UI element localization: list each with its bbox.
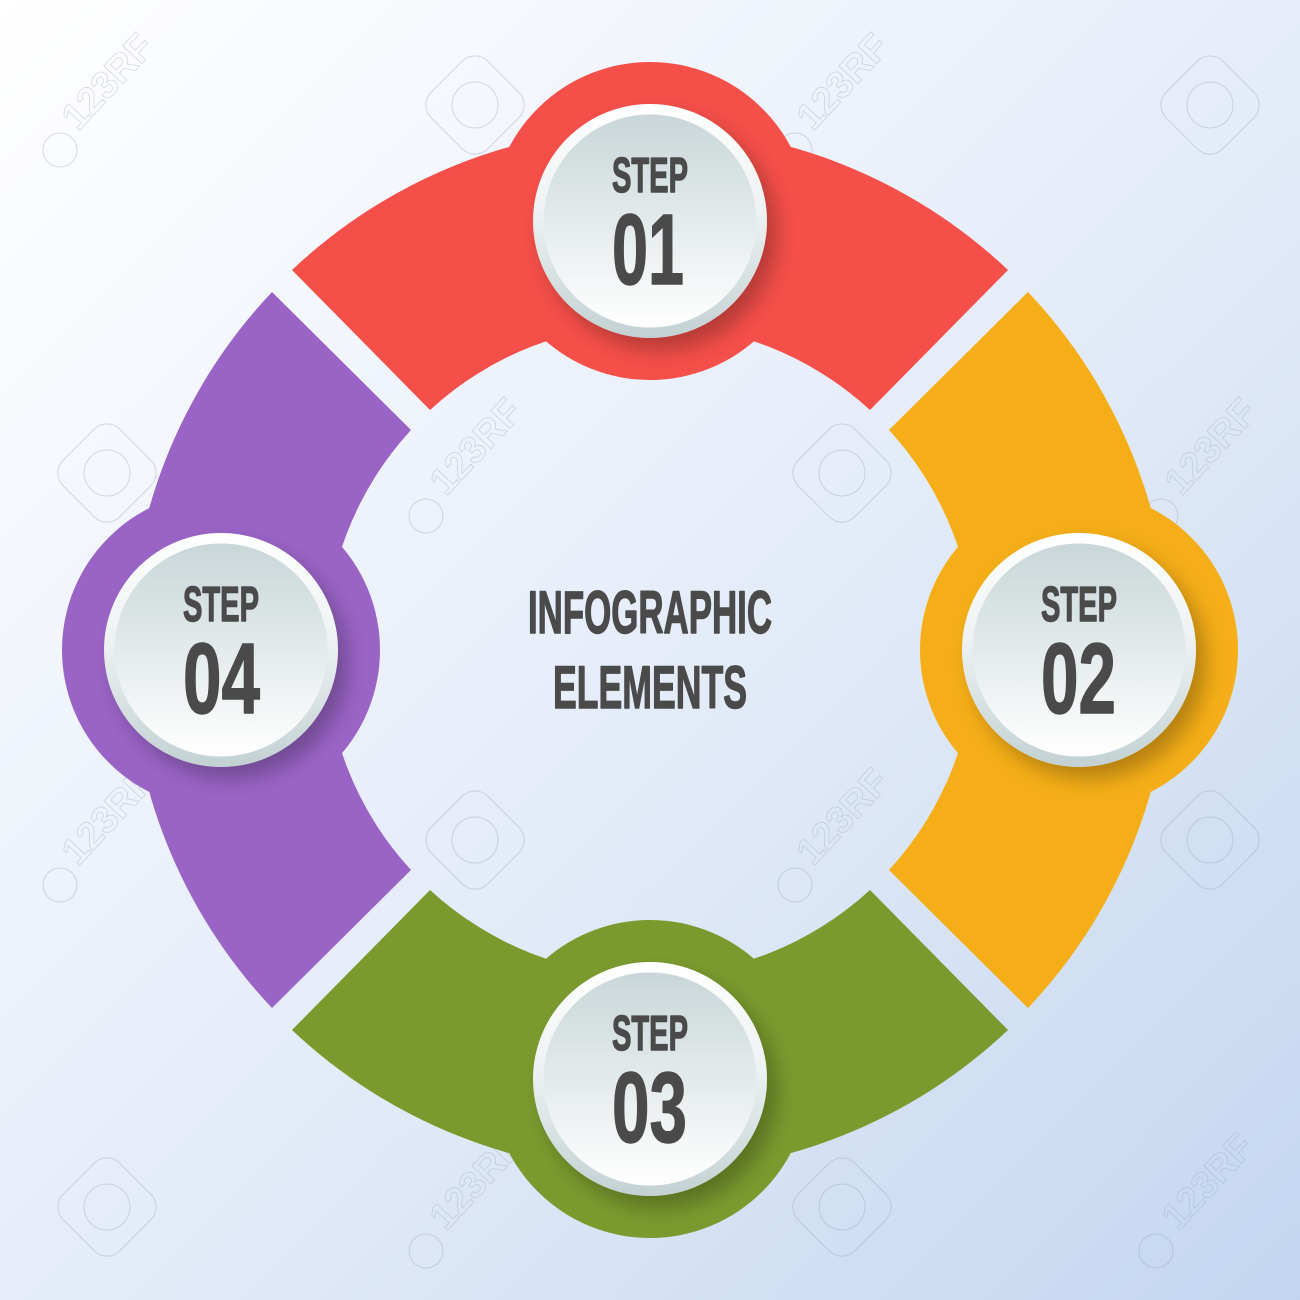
watermarks: 123RF: [422, 1126, 530, 1238]
badge: step 04: STEP: [183, 578, 259, 632]
badge: step 03: 03: [612, 1052, 687, 1164]
badge: step 03: [533, 962, 767, 1196]
segment: step 04 purple: [62, 292, 411, 1008]
badge: step 02: [962, 533, 1196, 767]
watermarks: 123RF: [422, 391, 530, 503]
watermarks: 123RF: [54, 761, 162, 873]
badge: step 02: STEP: [1041, 578, 1117, 632]
segment: step 01 red: [292, 62, 1008, 410]
watermarks: 123RF: [1157, 391, 1265, 503]
center title: INFOGRAPHIC: [528, 579, 772, 646]
watermarks: 123RF: [789, 26, 897, 138]
center title: [528, 579, 772, 721]
watermarks: 123RF: [54, 26, 162, 138]
badge: step 01: [533, 104, 767, 338]
badge: step 04: [104, 533, 338, 767]
segment: step 03 green: [292, 890, 1008, 1238]
badge: step 01: STEP: [612, 149, 688, 203]
badge: step 02: 02: [1041, 623, 1116, 735]
badge: step 03: STEP: [612, 1007, 688, 1061]
badge: step 01: 01: [612, 194, 684, 306]
watermarks: 123RF: [1154, 1126, 1262, 1238]
segment: step 02 yellow: [889, 292, 1238, 1008]
watermarks: 123RF: [789, 761, 897, 873]
badge: step 04: 04: [183, 623, 260, 735]
center title: ELEMENTS: [553, 654, 747, 721]
